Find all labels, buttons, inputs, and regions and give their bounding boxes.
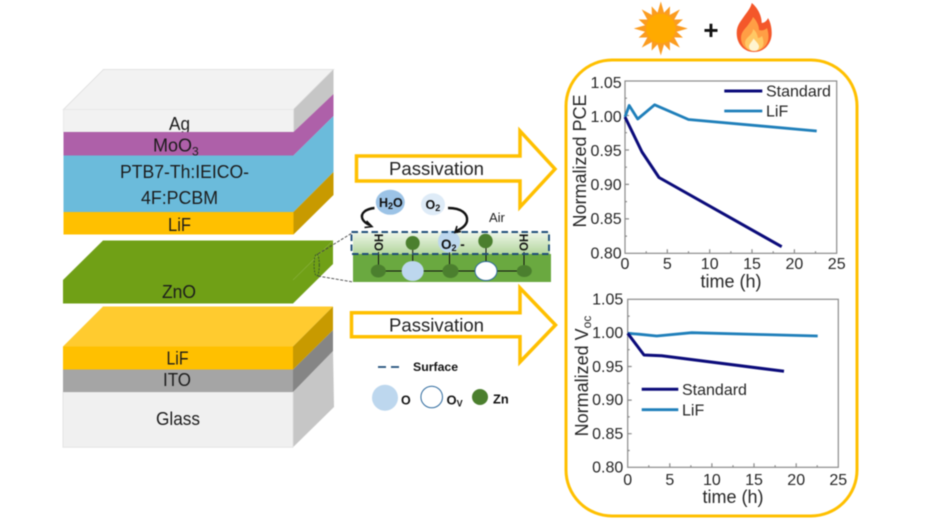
y tick labels: 0.95 <box>591 143 622 160</box>
layer: LiF upper: LiF <box>168 215 191 235</box>
OH labels: OH <box>519 234 531 251</box>
O key: O <box>401 394 411 408</box>
arrow: upper passivation: Passivation <box>389 159 484 179</box>
chart legend <box>724 84 831 120</box>
layer: MoO3: 3 <box>192 144 199 158</box>
x tick labels: 20 <box>786 256 803 273</box>
x tick labels: 0 <box>623 472 632 489</box>
y tick labels: 1.05 <box>592 292 623 308</box>
Ov key <box>421 386 463 408</box>
ZnO surface schematic <box>352 190 551 282</box>
layer: LiF lower: LiF <box>166 348 188 368</box>
y axis title: Normalized V <box>572 328 592 436</box>
layer: ZnO <box>63 240 333 304</box>
chart legend: LiF <box>682 402 704 420</box>
axes frame and ticks <box>628 299 838 467</box>
OH labels <box>374 234 531 251</box>
layer: MoO3: MoO <box>153 136 192 156</box>
layer: PTB7-Th:IEICO-4F:PCBM: PTB7-Th:IEICO- <box>120 162 249 182</box>
layer: MoO3 <box>64 94 334 158</box>
y tick labels <box>592 292 623 476</box>
x tick labels: 0 <box>621 256 630 273</box>
legend: surface and atoms <box>372 360 509 411</box>
lattice atoms <box>371 261 532 281</box>
chart: normalized PCE vs time <box>570 75 846 292</box>
layer: Ag: Ag <box>169 114 190 134</box>
chart legend: LiF <box>766 104 788 120</box>
O2- adsorbed bubble <box>438 230 460 252</box>
O2- label: 2 <box>452 243 457 253</box>
layer: LiF lower <box>63 306 333 370</box>
device stack: bottom layers <box>63 306 334 447</box>
icon: sun <box>634 2 688 56</box>
H2O bubble: O <box>393 196 403 210</box>
Ov key: O <box>446 392 457 408</box>
surface dash key: Surface <box>413 360 458 374</box>
layer: Glass: Glass <box>156 409 200 429</box>
layer: PTB7-Th:IEICO-4F:PCBM: 4F:PCBM <box>141 188 218 208</box>
Air label: Air <box>489 210 506 225</box>
arrow: lower passivation <box>352 288 556 362</box>
x axis title: time (h) <box>702 487 764 507</box>
chart legend: Standard <box>682 382 747 399</box>
H2O bubble <box>376 190 405 215</box>
O2 bubble <box>421 193 445 215</box>
layer: LiF upper <box>64 172 334 235</box>
y tick labels: 1.00 <box>591 109 622 126</box>
surface dashed outline <box>352 232 549 254</box>
axes frame and ticks <box>625 81 837 253</box>
layer: PTB7-Th:IEICO-4F:PCBM <box>64 116 334 212</box>
surface band <box>353 232 550 254</box>
y tick labels: 0.85 <box>591 211 622 228</box>
x tick labels: 10 <box>701 256 719 273</box>
y tick labels: 1.05 <box>591 75 622 92</box>
x tick labels: 5 <box>663 256 672 273</box>
y tick labels: 0.95 <box>592 359 623 376</box>
curved arrow: O2 to surface <box>448 208 467 232</box>
chart legend: Standard <box>766 84 831 100</box>
O2 bubble: 2 <box>435 203 440 213</box>
series: LiF <box>625 105 817 131</box>
y tick labels: 0.80 <box>591 246 622 262</box>
layer: ITO: ITO <box>163 370 191 390</box>
y tick labels: 0.90 <box>591 177 622 194</box>
chart legend <box>642 382 747 420</box>
layer: Ag <box>64 70 334 134</box>
x tick labels <box>623 472 847 489</box>
y axis title: Normalized PCE <box>570 94 590 228</box>
x axis title: time (h) <box>700 272 762 292</box>
y tick labels <box>591 75 622 262</box>
arrow: lower passivation: Passivation <box>389 316 484 336</box>
y axis title: oc <box>580 316 594 328</box>
x tick labels: 15 <box>745 472 763 489</box>
series: Standard <box>628 333 784 371</box>
x tick labels: 25 <box>829 472 847 489</box>
bonds <box>378 245 524 271</box>
Zn key: Zn <box>493 392 509 406</box>
H2O bubble: H <box>379 196 388 210</box>
O2 bubble: O <box>426 198 435 212</box>
x tick labels: 10 <box>703 472 721 489</box>
layer: Glass <box>63 351 334 447</box>
surface Zn atoms <box>406 234 493 250</box>
bulk ZnO band <box>353 254 551 282</box>
chart: normalized Voc vs time <box>572 292 847 507</box>
series: Standard <box>625 117 782 247</box>
O2- label: O <box>441 237 452 252</box>
series: LiF <box>628 333 818 336</box>
Ov key: V <box>457 398 463 408</box>
plus sign: + <box>703 15 719 45</box>
layer: ITO <box>63 330 333 392</box>
x tick labels: 25 <box>828 256 846 273</box>
curved arrow: H2O to surface <box>362 208 374 228</box>
y tick labels: 0.80 <box>592 460 623 476</box>
OH labels: OH <box>374 234 386 251</box>
zoom guide lines from ZnO <box>318 233 353 282</box>
O2- label: - <box>457 237 465 252</box>
x tick labels: 5 <box>665 472 674 489</box>
arrow: upper passivation <box>356 131 555 207</box>
device stack: top layers <box>64 70 334 235</box>
x tick labels <box>621 256 846 273</box>
H2O bubble: 2 <box>388 201 393 211</box>
icon: flame <box>737 3 772 52</box>
y tick labels: 0.90 <box>592 392 623 409</box>
x tick labels: 15 <box>743 256 761 273</box>
y tick labels: 1.00 <box>592 325 623 342</box>
layer: ZnO: ZnO <box>162 282 196 302</box>
panel: stability charts <box>566 60 857 516</box>
y tick labels: 0.85 <box>592 426 623 443</box>
x tick labels: 20 <box>787 472 805 489</box>
